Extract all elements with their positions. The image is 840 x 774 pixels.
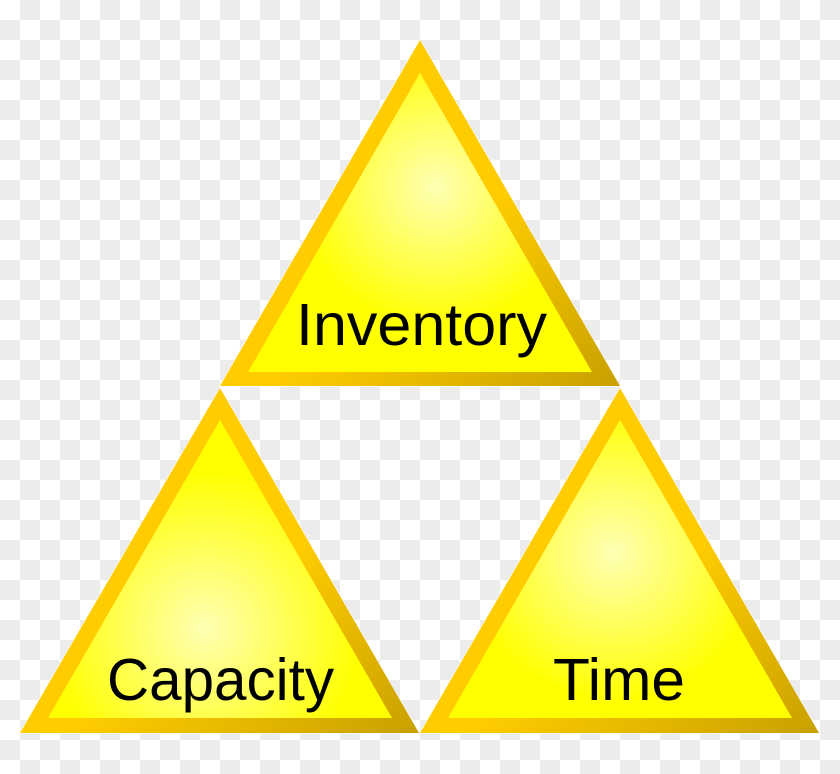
triangle: Capacity [20,388,419,733]
label: Capacity: Capacity [107,647,334,713]
label: Time: Time [553,647,685,713]
triangle: Time [420,388,819,733]
triangle: Inventory [220,40,620,386]
label: Inventory: Inventory [296,292,548,358]
